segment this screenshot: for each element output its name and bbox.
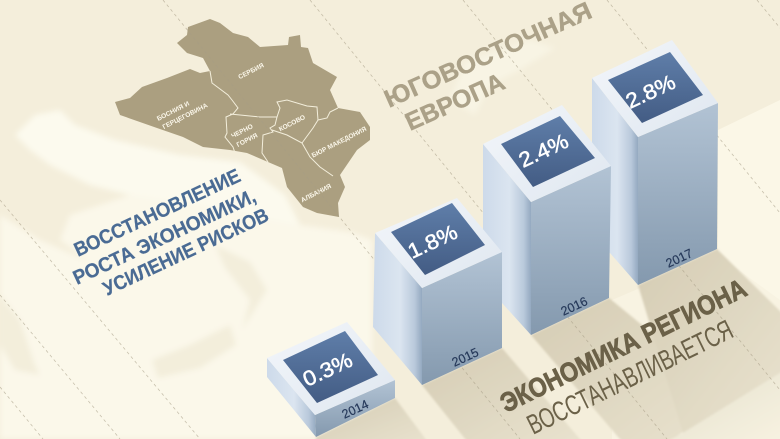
bar 2015: 2015 <box>450 345 481 370</box>
heading: Southeast Europe: ЕВРОПА <box>401 68 509 136</box>
bar 2015: 1.8% <box>404 221 461 264</box>
country labels: АЛБАНИЯ <box>300 183 333 204</box>
country labels: ГЕРЦЕГОВИНА <box>162 102 209 131</box>
bar 2014 <box>267 322 395 437</box>
country labels: ЧЕРНО <box>230 123 254 140</box>
bar 2017 <box>592 40 718 285</box>
country borders <box>210 71 338 176</box>
bar 2017: 2017 <box>664 246 695 271</box>
country labels: БЮР МАКЕДОНИЯ <box>311 126 368 160</box>
country labels <box>156 62 368 204</box>
country labels: БОСНИЯ И <box>156 100 191 123</box>
subheading: recovery of growth, rising risks: ВОССТАНОВЛЕНИЕ <box>71 165 244 262</box>
subheading: recovery of growth, rising risks: РОСТА ЭКОНОМИКИ, <box>70 185 259 290</box>
bar shadows <box>316 249 780 439</box>
country labels: ГОРИЯ <box>236 132 259 149</box>
country labels: КОСОВО <box>278 114 307 133</box>
heading: Southeast Europe: ЮГОВОСТОЧНАЯ <box>380 0 596 113</box>
bar 2014: 2014 <box>340 397 371 422</box>
map: Southeast Europe countries <box>115 19 370 217</box>
bar 2014: 0.3% <box>299 349 356 392</box>
bar 2016: 2016 <box>559 294 590 319</box>
bar 2016 <box>483 105 611 335</box>
bar 2015 <box>373 198 502 385</box>
subheading: recovery of growth, rising risks: УСИЛЕНИЕ РИСКОВ <box>100 205 272 301</box>
bar 2016: 2.4% <box>515 130 572 173</box>
bar 2017: 2.8% <box>622 71 679 114</box>
country labels: СЕРБИЯ <box>237 62 266 81</box>
